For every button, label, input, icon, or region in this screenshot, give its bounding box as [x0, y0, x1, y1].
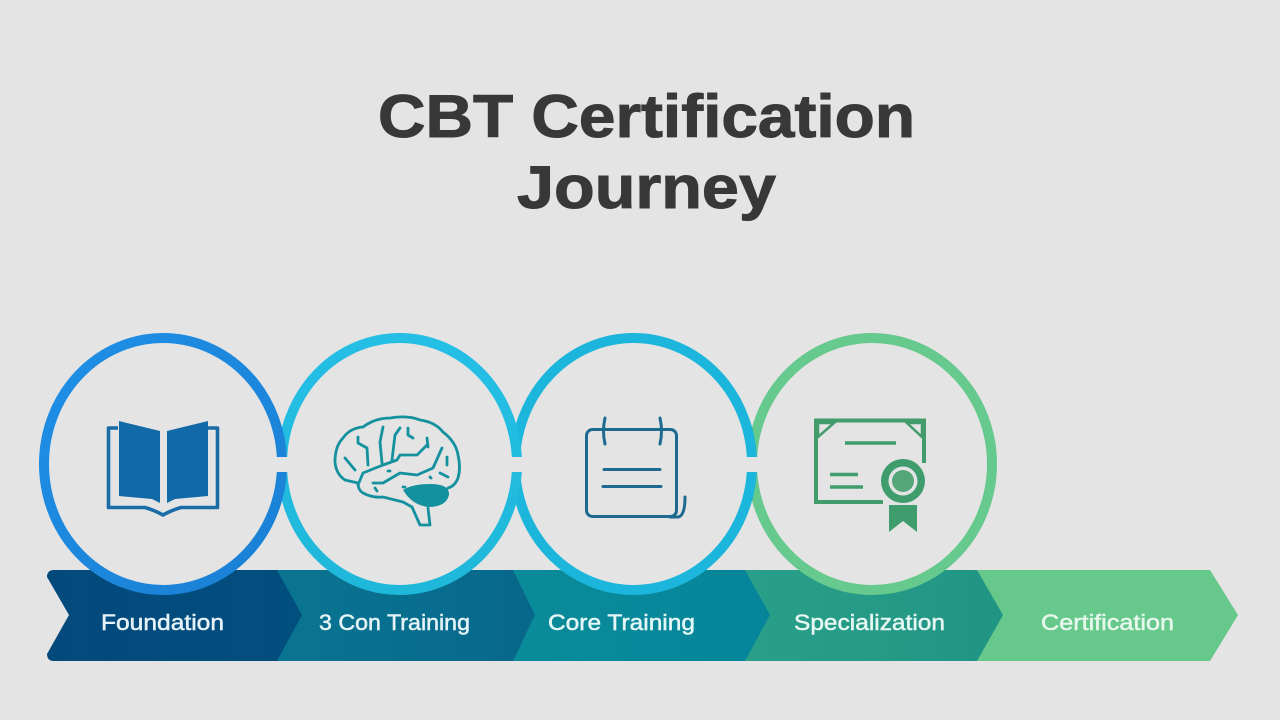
ribbon segment: certification [950, 570, 1238, 661]
ribbon segment: certification: Certification [1041, 610, 1174, 635]
title [378, 83, 915, 221]
circle: early core training [282, 338, 517, 590]
progress ribbon [47, 570, 1238, 661]
ribbon segment: early core training: 3 Con Training [319, 610, 470, 635]
ribbon segment: specialization [720, 570, 1003, 661]
ribbon segment: foundation [47, 570, 302, 661]
ribbon segment: core training: Core Training [548, 610, 695, 635]
ribbon segment: foundation: Foundation [101, 610, 224, 635]
title: Journey [517, 154, 777, 221]
ribbon segment: early core training [260, 570, 535, 661]
icon: calendar [586, 418, 685, 517]
award seal [881, 459, 925, 503]
connector gaps [270, 457, 763, 472]
icon: brain [335, 417, 460, 525]
circle: foundation [44, 338, 282, 590]
circle: core training [515, 338, 752, 590]
cerebellum [403, 484, 449, 507]
circle: specialization [752, 338, 992, 590]
icon: certificate [816, 420, 925, 532]
seal ribbon [889, 505, 917, 532]
title: CBT Certification [378, 83, 915, 150]
ribbon segment: core training [490, 570, 770, 661]
ribbon segment: specialization: Specialization [794, 610, 945, 635]
icon: book [108, 421, 218, 515]
